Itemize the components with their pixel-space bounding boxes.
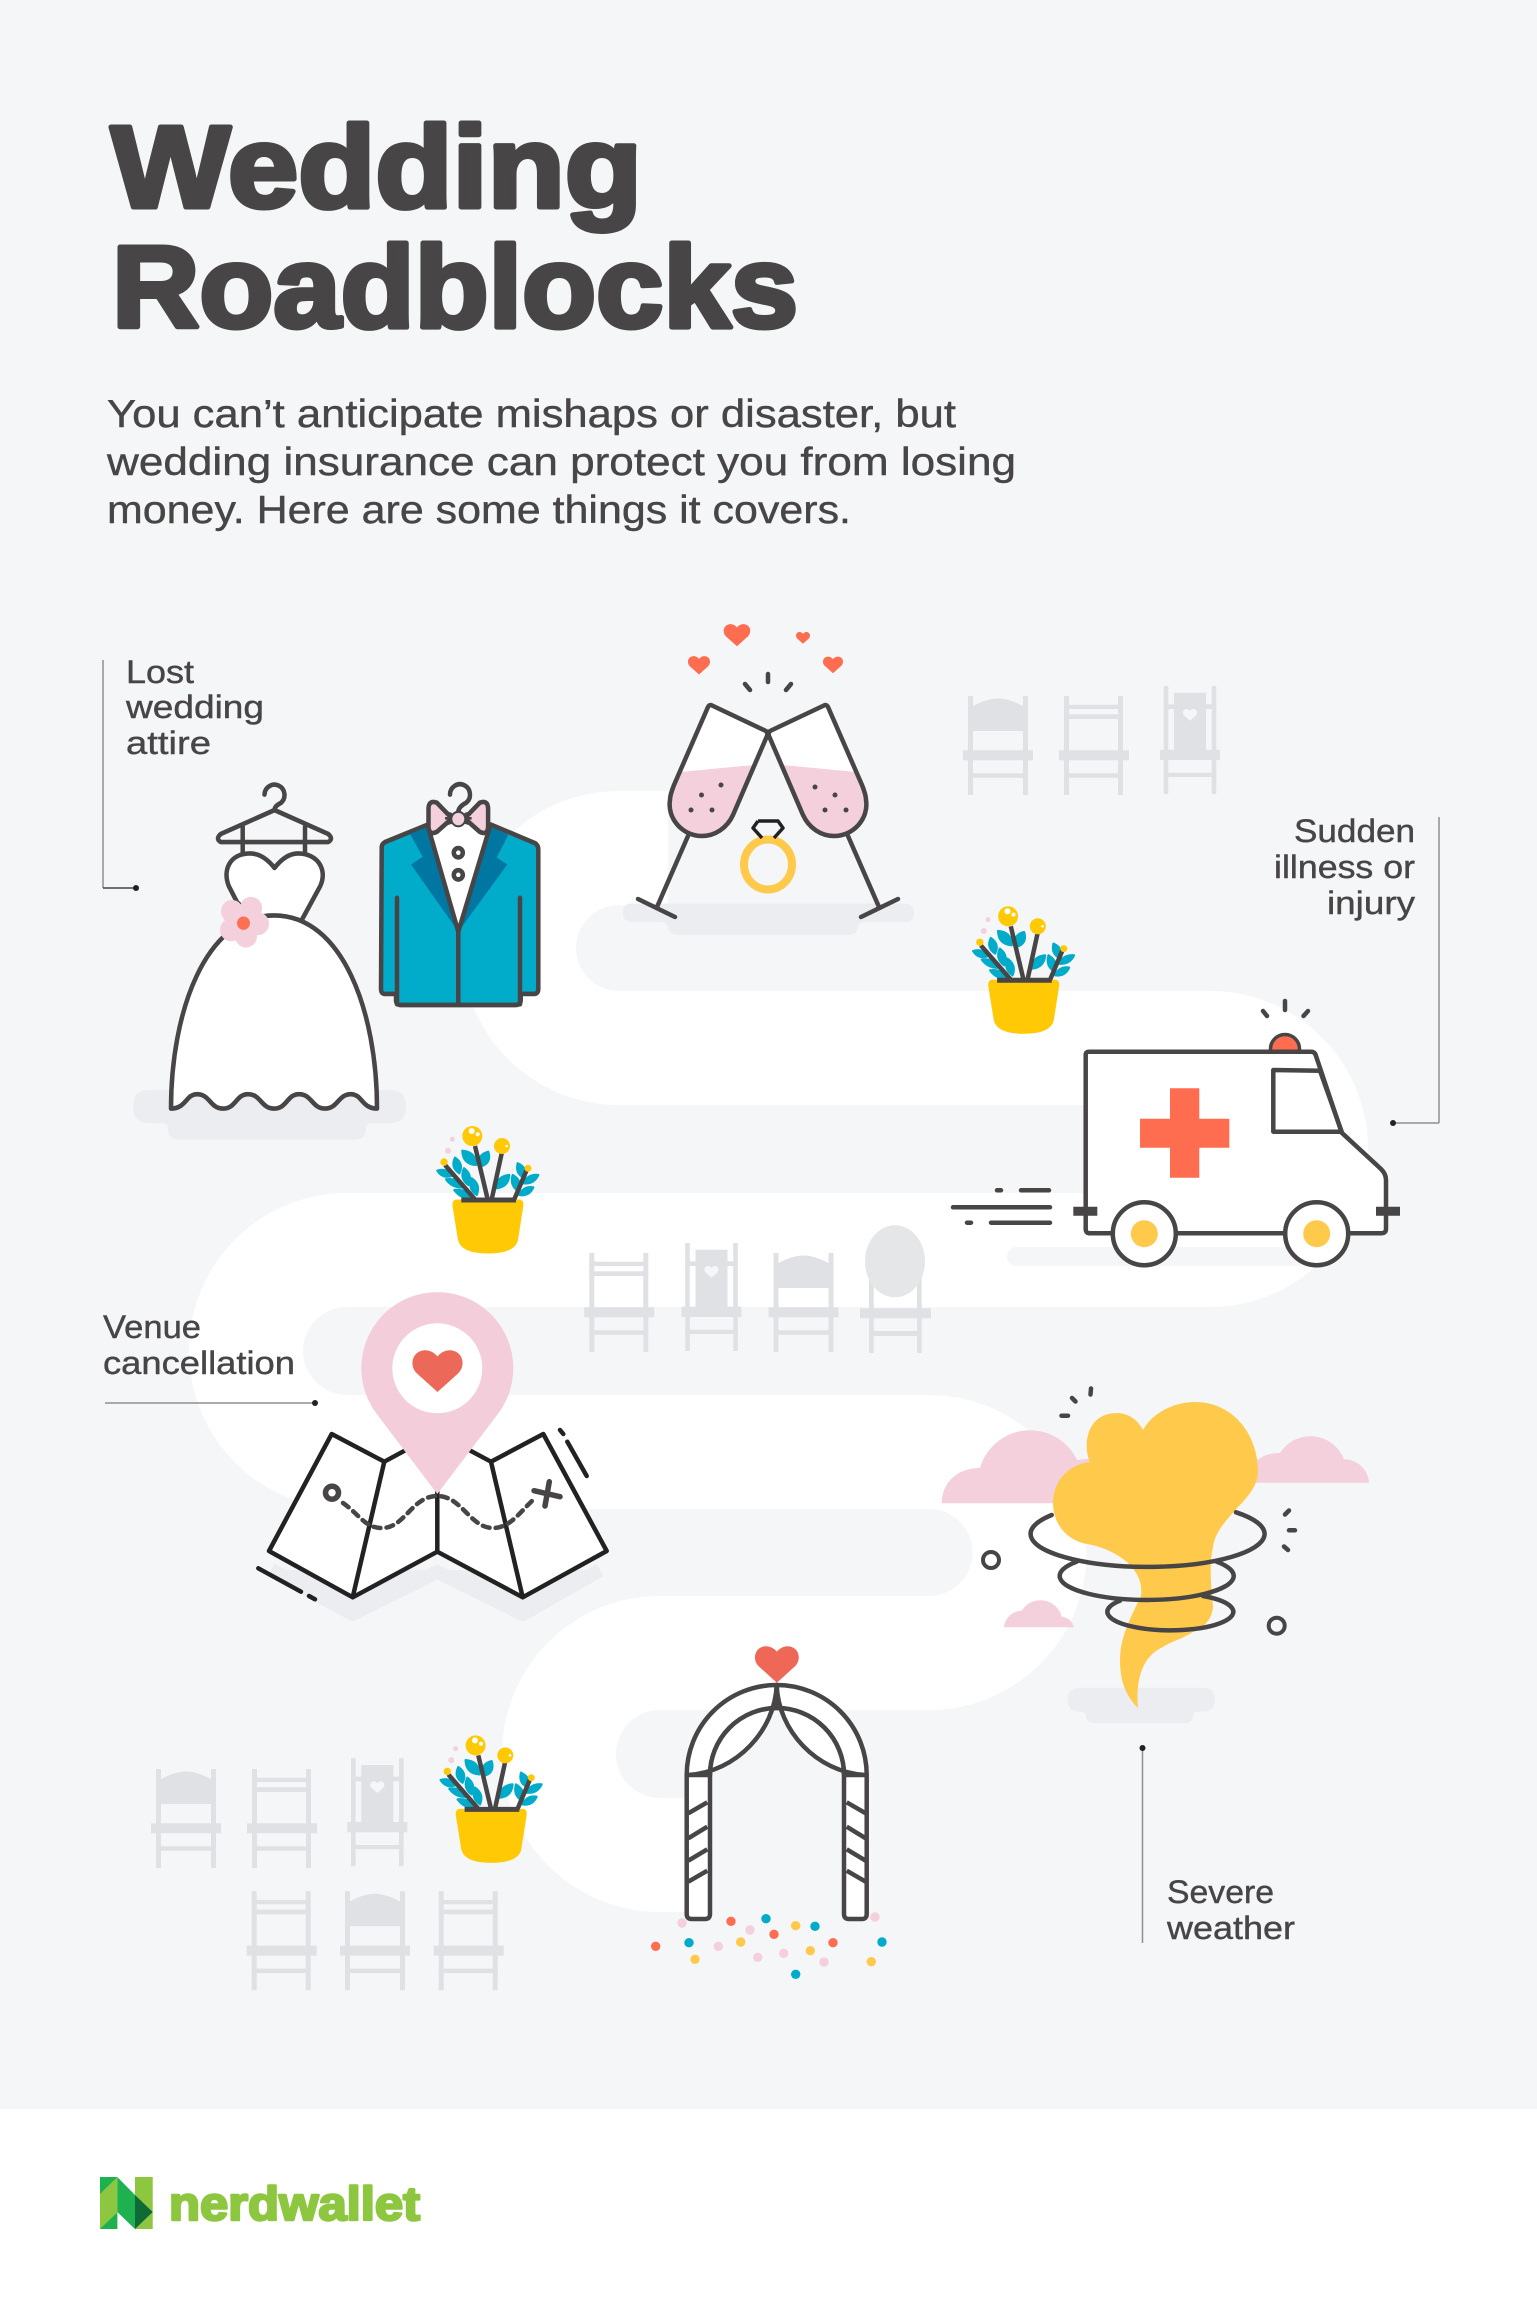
winding white road [246, 848, 1311, 1855]
pin [361, 1292, 513, 1494]
icon: tuxedo [381, 784, 538, 1005]
dress shadow [133, 1090, 406, 1140]
icon: flower pot bottom [441, 1735, 542, 1863]
icon: wedding dress [133, 785, 406, 1140]
label: lost wedding attire: Lost [126, 654, 194, 690]
intro text: money. Here are some things it covers. [107, 489, 851, 532]
skirt [171, 915, 377, 1109]
siren sparks [1263, 1001, 1308, 1016]
label: sudden illness or injury: Sudden [1294, 813, 1415, 849]
label: lost wedding attire: wedding [125, 689, 264, 725]
curtains [688, 1685, 865, 1775]
van body [1086, 1052, 1386, 1233]
footer band [0, 2109, 1537, 2299]
clouds [942, 1430, 1095, 1503]
red cross [1140, 1088, 1229, 1178]
sparks [1062, 1388, 1295, 1550]
confetti [651, 1912, 887, 1979]
bow tie [428, 802, 488, 833]
arch heart [755, 1646, 799, 1683]
chairs: top row [963, 686, 1220, 795]
label: sudden illness or injury: illness or [1274, 849, 1415, 885]
hearts [724, 624, 750, 646]
label: sudden illness or injury: injury [1327, 885, 1415, 921]
ambulance shadow [1007, 1247, 1307, 1266]
chairs: middle row [584, 1225, 931, 1353]
label: venue cancellation [103, 1309, 318, 1406]
ring [744, 821, 792, 890]
route [343, 1496, 533, 1528]
label: venue cancellation: Venue [103, 1309, 201, 1345]
siren [1270, 1034, 1300, 1064]
route end [534, 1482, 560, 1506]
funnel [1053, 1402, 1258, 1708]
map [269, 1433, 607, 1597]
sparks [745, 674, 791, 690]
bumpers [1073, 1207, 1400, 1216]
intro text: wedding insurance can protect you from losing [106, 441, 1016, 484]
flower [220, 897, 269, 947]
icon: flower pot top right [973, 906, 1074, 1034]
title: Wedding [111, 102, 642, 232]
icon: flower pot centre [437, 1126, 538, 1254]
tornado shadow [1068, 1688, 1215, 1723]
wheels [1113, 1202, 1176, 1265]
icon: ambulance [953, 1001, 1400, 1266]
small circles [983, 1552, 999, 1568]
label: venue cancellation: cancellation [103, 1345, 295, 1381]
title: Roadblocks [112, 222, 798, 352]
speed lines [953, 1190, 1050, 1223]
icon: map with pin [258, 1292, 607, 1614]
label: severe weather: Severe [1167, 1874, 1274, 1910]
right glass [769, 705, 898, 917]
chairs: bottom group [151, 1758, 504, 1990]
logo wordmark: nerdwallet [169, 2177, 420, 2230]
icon: wedding arch [651, 1646, 887, 1979]
label: sudden illness or injury [1274, 813, 1439, 1126]
route start [326, 1486, 338, 1499]
label: lost wedding attire [103, 654, 264, 891]
icon: tornado [942, 1388, 1369, 1723]
title [111, 102, 798, 352]
label: severe weather [1140, 1745, 1295, 1946]
label: lost wedding attire: attire [126, 725, 211, 761]
stripes [688, 1802, 866, 1882]
motion marks [258, 1430, 587, 1599]
oval back chair [860, 1225, 931, 1353]
logo mark [100, 2177, 153, 2229]
glasses shadow [623, 904, 914, 935]
hanger [218, 785, 331, 853]
intro text: You can’t anticipate mishaps or disaster, but [107, 393, 956, 436]
window [1273, 1070, 1342, 1132]
intro text [106, 393, 1016, 532]
label: severe weather: weather [1166, 1910, 1295, 1946]
map shadow [271, 1570, 600, 1614]
arch frame [687, 1685, 867, 1919]
wind rings [1031, 1512, 1265, 1630]
logo: nerdwallet [100, 2177, 420, 2230]
bodice [227, 853, 323, 935]
left glass [638, 705, 767, 917]
icon: champagne glasses [623, 624, 914, 935]
